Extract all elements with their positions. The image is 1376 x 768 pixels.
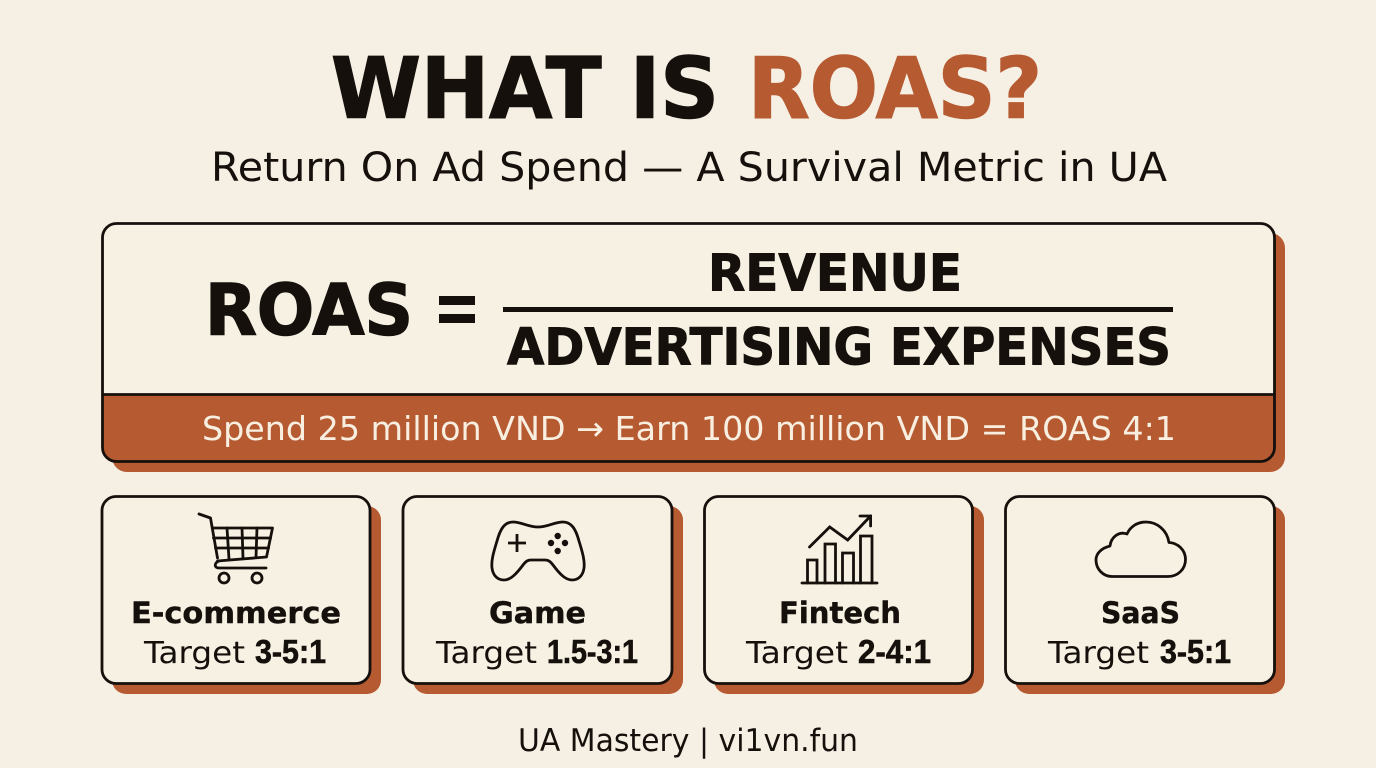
- target: Target: [143, 636, 245, 671]
- panel shadow: [112, 233, 1285, 472]
- footer: UA Mastery | vi1vn.fun: [518, 723, 858, 759]
- label: Fintech: [779, 596, 901, 630]
- target: Target: [745, 636, 848, 671]
- title: [331, 40, 1042, 138]
- card: e-commerce: [102, 496, 381, 694]
- icon: shopping cart: [199, 514, 272, 583]
- equals sign: [439, 296, 475, 323]
- target: Target: [1047, 636, 1149, 671]
- panel: formula: [102, 224, 1285, 472]
- label: SaaS: [1101, 596, 1180, 630]
- formula left side: ROAS: [205, 270, 413, 352]
- card: fintech: [704, 496, 984, 694]
- panel outline: [102, 224, 1274, 462]
- target: 1.5-3:1: [547, 633, 638, 670]
- icon: game controller: [492, 522, 584, 580]
- icon: growth chart: [802, 516, 877, 583]
- example band: [102, 395, 1274, 462]
- numerator: REVENUE: [708, 244, 962, 304]
- icon: cloud: [1096, 522, 1186, 576]
- target: [745, 633, 931, 671]
- denominator: ADVERTISING EXPENSES: [507, 318, 1171, 378]
- title: ROAS?: [748, 40, 1042, 138]
- target: 3-5:1: [255, 633, 326, 670]
- card: saas: [1006, 496, 1285, 694]
- target: 3-5:1: [1160, 633, 1231, 670]
- subtitle: Return On Ad Spend — A Survival Metric in UA: [211, 145, 1168, 191]
- example band: Spend 25 million VND → Earn 100 million VND = ROAS 4:1: [202, 409, 1176, 448]
- target: Target: [435, 636, 537, 671]
- target: [435, 633, 638, 671]
- label: E-commerce: [131, 596, 341, 630]
- card: game: [403, 496, 683, 694]
- target: [143, 633, 326, 671]
- target: 2-4:1: [858, 633, 931, 670]
- panel body: [102, 224, 1274, 462]
- label: Game: [489, 596, 586, 630]
- target: [1047, 633, 1231, 671]
- title: WHAT IS: [331, 40, 719, 138]
- fraction line: [503, 307, 1173, 312]
